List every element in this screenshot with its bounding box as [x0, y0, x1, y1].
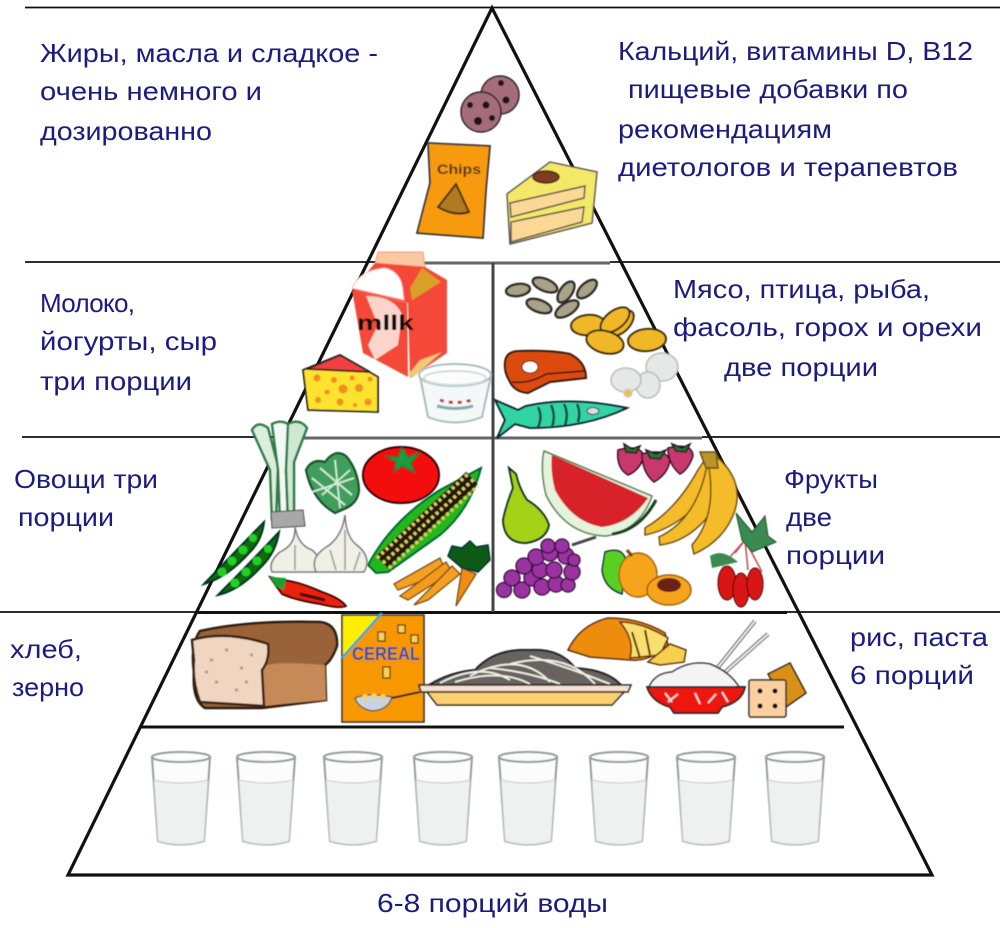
icon: steak: [505, 351, 586, 393]
icon: fish: [495, 400, 627, 438]
icon: bag of chips: Chips: [437, 161, 481, 177]
text: supplements: диетологов и терапевтов: [618, 152, 958, 182]
heading text: fats and sweets: очень немного и: [40, 76, 262, 106]
text: bread and grain: [10, 634, 84, 702]
icon: garlic: [271, 515, 367, 572]
icon: watermelon: [542, 451, 656, 536]
text: fruit: две: [786, 502, 832, 532]
icon: beans: [505, 275, 600, 321]
icon: water glass 8: [766, 752, 824, 844]
icon: cheese wedge: [303, 355, 378, 412]
text: rice and pasta: рис, паста: [850, 622, 989, 652]
icon: peas: [204, 522, 279, 595]
text: rice and pasta: 6 порций: [850, 660, 974, 690]
icon: chili pepper: [270, 577, 346, 607]
icon: yogurt cup: [419, 364, 491, 422]
text: supplements: Кальций, витамины D, B12: [618, 36, 973, 66]
text: dairy: [40, 288, 217, 396]
icon: bag of chips: [417, 143, 490, 238]
text: rice and pasta: [850, 622, 989, 690]
icon: water glass 1: [152, 752, 210, 844]
text: fruit: Фрукты: [784, 464, 878, 494]
text: vegetables: Овощи три: [14, 464, 158, 494]
icon: sliced loaf: [568, 618, 686, 665]
heading text: fats and sweets: дозированно: [40, 116, 212, 146]
icon: eggs: [611, 353, 678, 398]
icon: milk carton: [352, 252, 447, 378]
icon: bowl of rice: [647, 663, 745, 713]
icon: cookies: [461, 76, 519, 132]
icon: cereal box: [342, 613, 424, 722]
icon: crackers: [749, 663, 806, 717]
heading text: fats and sweets: Жиры, масла и сладкое -: [40, 38, 378, 68]
icon: chopsticks: [715, 621, 768, 674]
icon: nuts: [570, 302, 667, 358]
icon: strawberries: [618, 444, 693, 482]
icon: grapes: [496, 537, 596, 598]
text: protein: фасоль, горох и орехи: [673, 312, 982, 342]
icon: water glass 3: [324, 752, 382, 844]
icon: water glass 4: [414, 752, 472, 844]
icon: tomato: [363, 447, 439, 503]
icon: water glass 2: [237, 752, 295, 844]
text: water: 6-8 порций воды: [377, 888, 608, 918]
text: supplements: пищевые добавки по: [628, 74, 908, 104]
icon: carrots: [394, 541, 490, 606]
icon: corn cob: [368, 468, 481, 573]
text: bread and grain: хлеб,: [10, 634, 82, 664]
text: protein: Мясо, птица, рыба,: [673, 274, 930, 304]
icon: slice of cake: [507, 162, 597, 244]
icon: loaf of bread: [192, 622, 337, 708]
text: protein: [673, 274, 982, 382]
text: dairy: Молоко,: [40, 288, 135, 318]
text: dairy: три порции: [40, 366, 192, 396]
text: supplements: рекомендациям: [618, 114, 832, 144]
icon: milk carton: mllk: [357, 312, 414, 335]
icon: peaches: [602, 550, 691, 605]
icon: pear: [503, 468, 549, 543]
icon: water glass 7: [677, 752, 735, 844]
icon: bananas: [645, 452, 737, 554]
icon: artichoke: [306, 453, 359, 513]
text: supplements: [618, 36, 973, 182]
text: dairy: йогурты, сыр: [40, 326, 217, 356]
icon: water glass 5: [499, 752, 557, 844]
icon: cereal box: CEREAL: [352, 644, 420, 664]
icon: plate of pasta: [419, 650, 631, 705]
text: bread and grain: зерно: [12, 672, 84, 702]
icon: leek: [252, 422, 307, 528]
text: fruit: порции: [786, 540, 885, 570]
text: vegetables: порции: [18, 502, 114, 532]
icon: red berries with leaves: [710, 513, 776, 607]
text: protein: две порции: [724, 352, 878, 382]
text: vegetables: [14, 464, 158, 532]
icon: water glass 6: [590, 752, 648, 844]
heading text: fats and sweets: [40, 38, 378, 146]
text: fruit: [784, 464, 885, 570]
